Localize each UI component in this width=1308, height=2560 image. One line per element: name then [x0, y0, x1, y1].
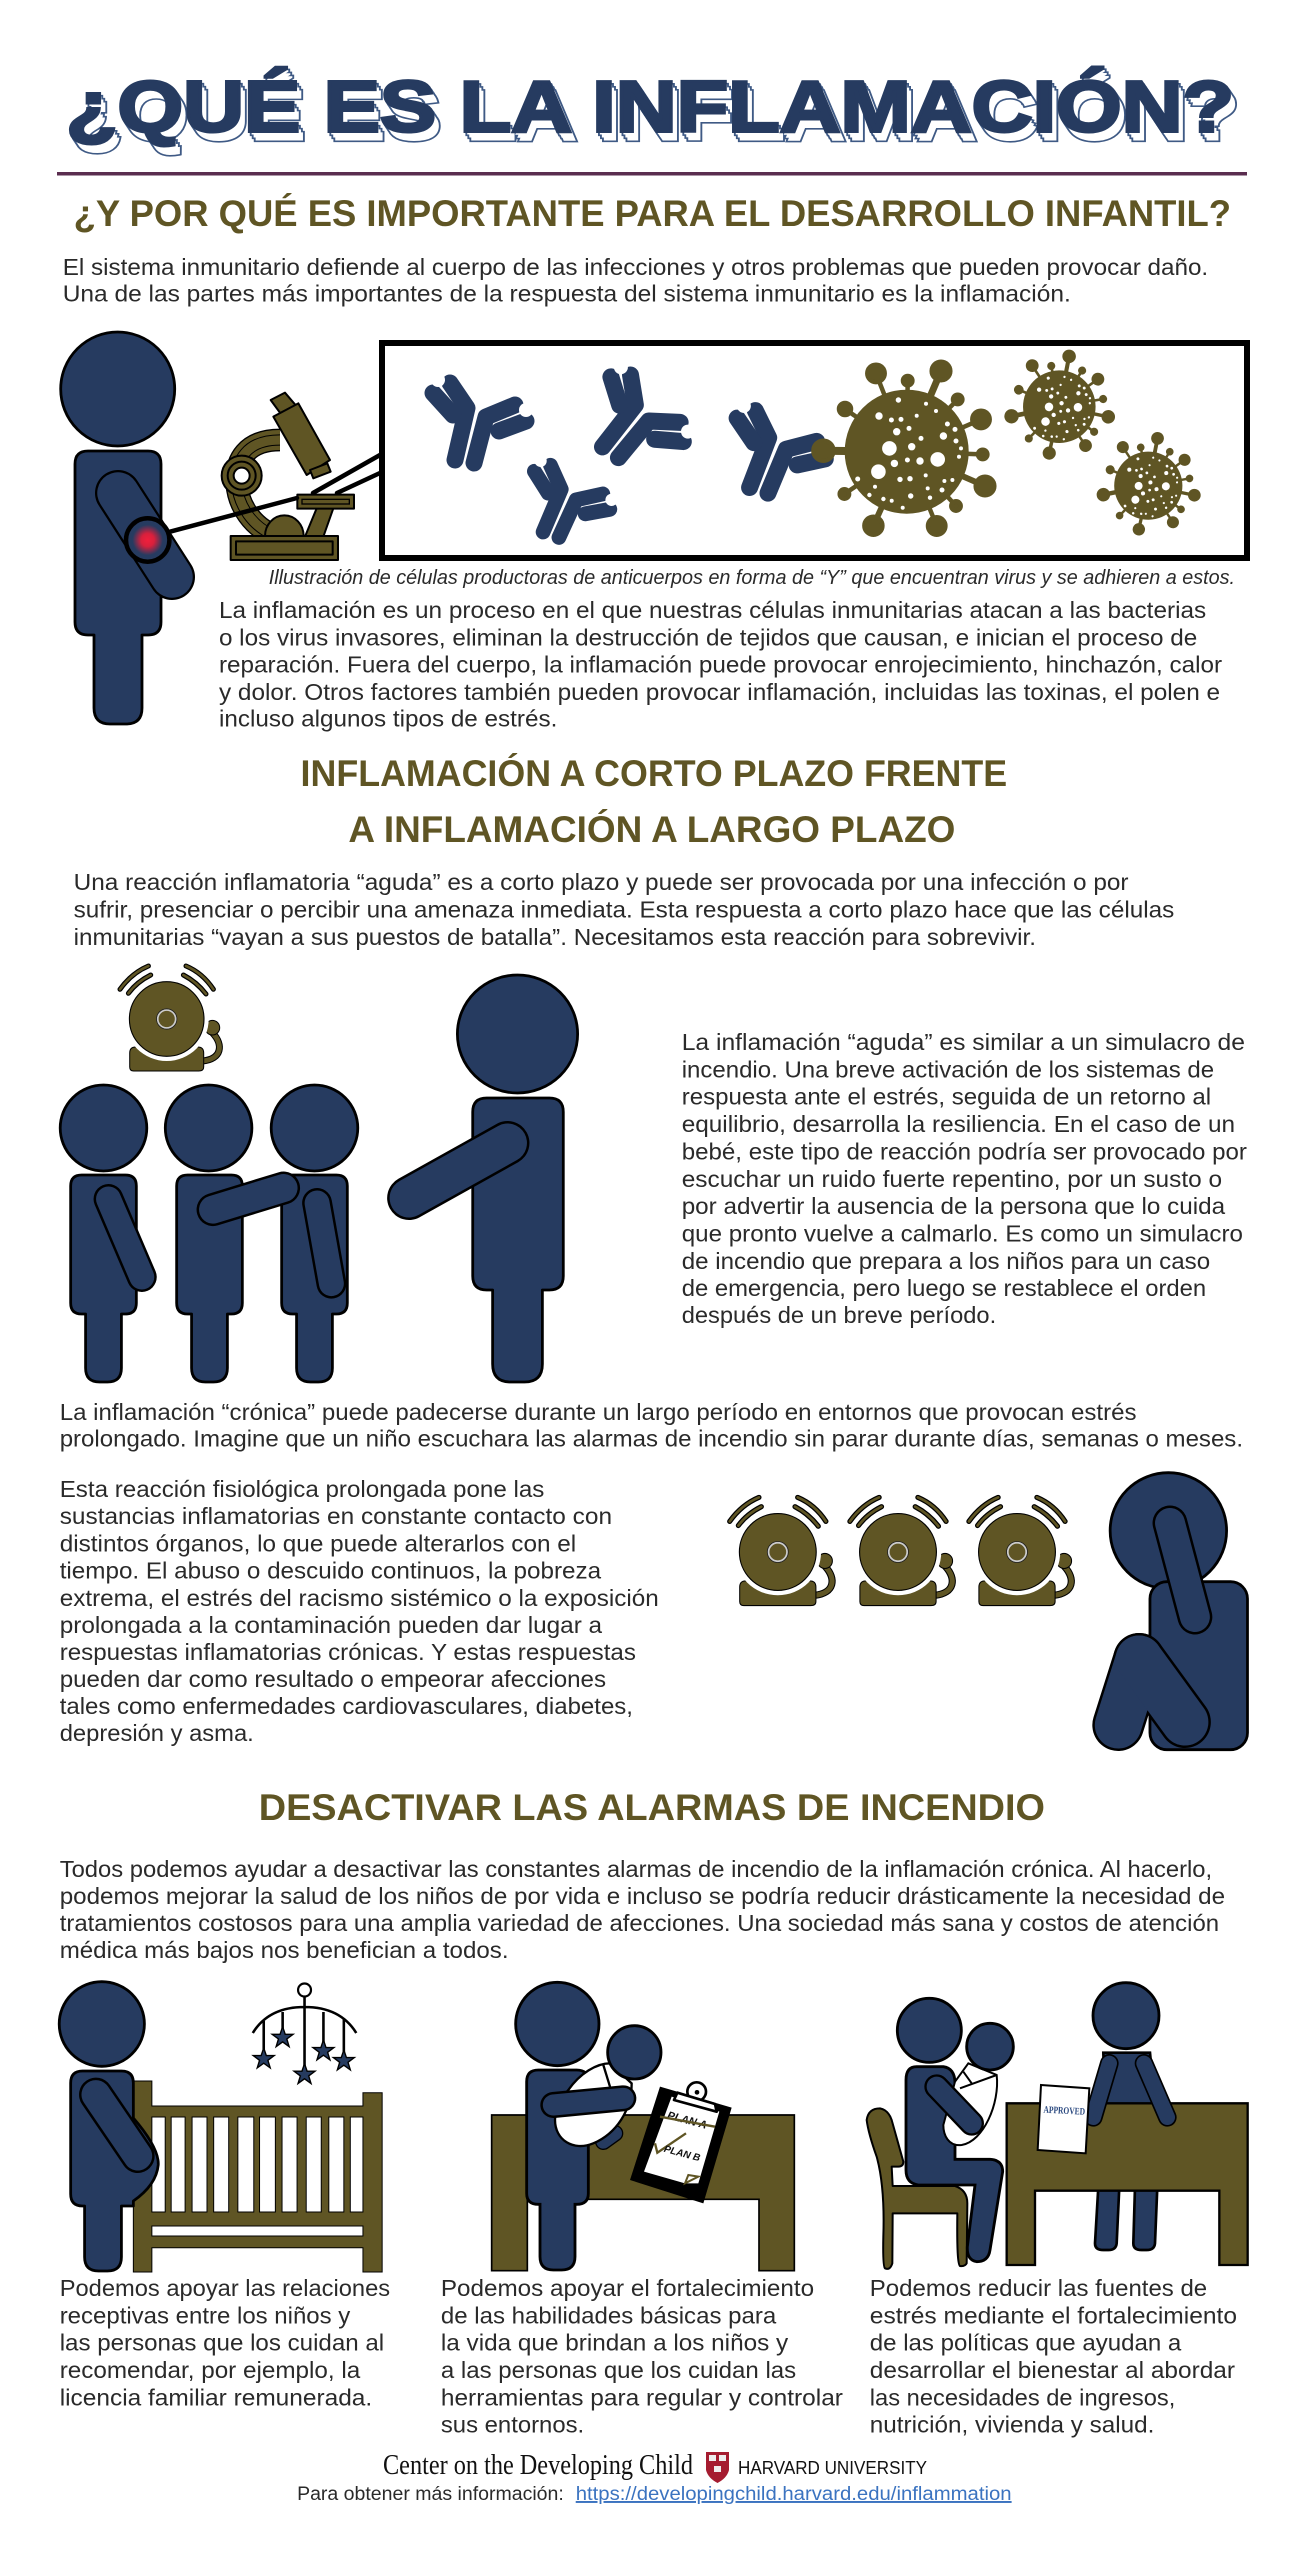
text block: policies: estrés mediante el fortalecimiento: [870, 2302, 1237, 2328]
illustration: children and adult during a fire drill: [60, 975, 578, 1382]
magnification lines: [170, 455, 380, 532]
icon: antibody: [579, 358, 710, 483]
text block: prolonged physiological reaction: respuestas inflamatorias crónicas. Y estas respuestas: [60, 1639, 636, 1665]
text block: acute inflammation as fire drill: incendio. Una breve activación de los sistemas de: [682, 1056, 1214, 1083]
text block: inflammation process: o los virus invasores, eliminan la destrucción de tejidos que causan, e inician el proceso de: [219, 624, 1197, 651]
seated official legs: [1095, 2053, 1157, 2250]
text block: inflammation process: reparación. Fuera del cuerpo, la inflamación puede provocar enrojecimiento, hinchazón, calor: [219, 652, 1222, 678]
text block: chronic inflammation: La inflamación “crónica” puede padecerse durante un largo período en entornos que provocan estrés: [60, 1399, 1137, 1425]
approved paper: [1038, 2085, 1089, 2153]
text block: life skills: la vida que brindan a los niños y: [441, 2330, 788, 2356]
text block: acute inflammation as fire drill: [682, 1029, 1247, 1328]
footer: more information link: Para obtener más información:: [297, 2483, 564, 2505]
text block: acute inflammation as fire drill: que pronto vuelve a calmarlo. Es como un simulacro: [682, 1220, 1243, 1246]
crib: [133, 2081, 382, 2272]
icon: crouching person: [1110, 1473, 1247, 1750]
text block: inflammation process: incluso algunos tipos de estrés.: [219, 706, 557, 732]
text block: prolonged physiological reaction: prolongada a la contaminación pueden dar lugar a: [60, 1612, 603, 1638]
text block: acute inflammation as fire drill: escuchar un ruido fuerte repentino, por un susto o: [682, 1166, 1222, 1192]
text block: responsive relationships: Podemos apoyar las relaciones: [60, 2275, 390, 2301]
text block: helping: Todos podemos ayudar a desactivar las constantes alarmas de incendio de la inflamación crónica. Al hacerlo,: [60, 1856, 1212, 1882]
text block: acute reaction: Una reacción inflamatoria “aguda” es a corto plazo y puede ser provocada por una infección o por: [74, 869, 1129, 895]
icon: alarm bell: [730, 1497, 832, 1606]
text block: prolonged physiological reaction: distintos órganos, lo que puede alterarlos con el: [60, 1530, 576, 1557]
text block: chronic inflammation: [60, 1399, 1243, 1452]
text block: responsive relationships: las personas que los cuidan al: [60, 2330, 384, 2356]
heading: short vs long term: [301, 752, 1007, 850]
icon: antibody: [522, 454, 623, 546]
clipboard with plans: [630, 2082, 732, 2203]
illustration: caregiver at crib: [59, 1982, 382, 2272]
text block: prolonged physiological reaction: [60, 1476, 659, 1746]
icon: antibody attached to virus: [725, 398, 839, 501]
text block: acute reaction: sufrir, presenciar o percibir una amenaza inmediata. Esta respuesta a corto plazo hace que las células: [74, 896, 1174, 923]
text block: policies: las necesidades de ingresos,: [870, 2384, 1175, 2410]
text block: helping: podemos mejorar la salud de los niños de por vida e incluso se podría reducir drásticamente la necesidad de: [60, 1883, 1225, 1909]
icon: microscope: [222, 393, 354, 560]
text block: responsive relationships: [60, 2275, 390, 2410]
text block: acute inflammation as fire drill: bebé, este tipo de reacción podría ser provocado por: [682, 1138, 1247, 1165]
text block: inflammation process: La inflamación es un proceso en el que nuestras células inmunitarias atacan a las bacterias: [219, 597, 1206, 623]
child 1: [60, 1085, 147, 1382]
text block: policies: de las políticas que ayudan a: [870, 2330, 1182, 2356]
text block: life skills: [441, 2275, 843, 2438]
icon: alarm bell: [120, 966, 220, 1071]
text block: helping: tratamientos costosos para una amplia variedad de afecciones. Una sociedad más sana y costos de atención: [60, 1910, 1219, 1936]
icon: antibody: [431, 373, 533, 463]
approved paper: APPROVED: [1043, 2105, 1085, 2118]
footer: more information link: [297, 2483, 1012, 2505]
text block: life skills: sus entornos.: [441, 2412, 584, 2438]
text block: prolonged physiological reaction: Esta reacción fisiológica prolongada pone las: [60, 1476, 544, 1502]
text block: acute inflammation as fire drill: por advertir la ausencia de la persona que lo cuida: [682, 1193, 1226, 1219]
caregiver: [59, 1982, 158, 2271]
icon: person with inflamed arm: [61, 332, 175, 724]
adult: [409, 975, 578, 1382]
footer logo: [383, 2450, 927, 2483]
text block: prolonged physiological reaction: extrema, el estrés del racismo sistémico o la exposición: [60, 1585, 659, 1611]
text block: acute reaction: [74, 869, 1174, 950]
text block: intro: Una de las partes más importantes de la respuesta del sistema inmunitario es la inflamación.: [63, 280, 1071, 307]
text block: prolonged physiological reaction: pueden dar como resultado o empeorar afecciones: [60, 1666, 606, 1692]
illustration: caregiver, baby and official at desk: [867, 1983, 1248, 2269]
footer: more information link: https://developingchild.harvard.edu/inflammation: [576, 2483, 1012, 2505]
text block: intro: [63, 254, 1208, 307]
text block: prolonged physiological reaction: sustancias inflamatorias en constante contacto con: [60, 1503, 612, 1529]
text block: life skills: Podemos apoyar el fortalecimiento: [441, 2275, 814, 2301]
text block: life skills: a las personas que los cuidan las: [441, 2357, 796, 2383]
heading: short vs long term: INFLAMACIÓN A CORTO PLAZO FRENTE: [301, 752, 1007, 794]
heading: short vs long term: A INFLAMACIÓN A LARGO PLAZO: [348, 808, 955, 850]
panel: magnified view of antibodies and viruses: [382, 343, 1247, 558]
clipboard with plans: PLAN B: [663, 2144, 701, 2164]
text block: acute inflammation as fire drill: después de un breve período.: [682, 1302, 996, 1328]
text block: acute inflammation as fire drill: respuesta ante el estrés, seguida de un retorno al: [682, 1084, 1211, 1110]
text block: intro: El sistema inmunitario defiende al cuerpo de las infecciones y otros problemas que pueden provocar daño.: [63, 254, 1208, 280]
icon: virus large: [813, 362, 994, 535]
icon: alarm bell: [969, 1497, 1072, 1606]
text block: acute inflammation as fire drill: equilibrio, desarrolla la resiliencia. En el caso de un: [682, 1111, 1235, 1137]
text block: prolonged physiological reaction: depresión y asma.: [60, 1720, 254, 1746]
text block: policies: Podemos reducir las fuentes de: [870, 2275, 1207, 2301]
icon: Harvard shield: [706, 2452, 729, 2483]
text block: helping: médica más bajos nos benefician a todos.: [60, 1937, 509, 1963]
text block: inflammation process: y dolor. Otros factores también pueden provocar inflamación, incluidas las toxinas, el polen e: [219, 679, 1220, 705]
child 2: [165, 1085, 284, 1382]
text block: prolonged physiological reaction: tales como enfermedades cardiovasculares, diabetes,: [60, 1693, 633, 1719]
footer logo: Center on the Developing Child: [383, 2450, 693, 2481]
title: [66, 66, 1240, 156]
text block: responsive relationships: recomendar, por ejemplo, la: [60, 2357, 361, 2383]
text block: helping: [60, 1856, 1225, 1963]
text block: policies: nutrición, vivienda y salud.: [870, 2412, 1154, 2438]
text block: acute inflammation as fire drill: de emergencia, pero luego se restablece el orden: [682, 1275, 1206, 1301]
text block: life skills: de las habilidades básicas para: [441, 2302, 777, 2328]
footer logo: HARVARD UNIVERSITY: [738, 2458, 927, 2478]
chair: [867, 2108, 967, 2269]
crib mobile: [253, 1984, 356, 2084]
illustration: adult with baby and clipboard: [492, 1982, 794, 2271]
clipboard with plans: PLAN A: [666, 2110, 708, 2132]
text block: chronic inflammation: prolongado. Imagine que un niño escuchara las alarmas de incendio sin parar durante días, semanas o meses.: [60, 1426, 1243, 1452]
seated caregiver: [906, 2067, 1003, 2262]
caption: Illustración de células productoras de anticuerpos en forma de “Y” que encuentran virus y se adhieren a estos.: [269, 567, 1235, 589]
text block: policies: [870, 2275, 1237, 2438]
text block: prolonged physiological reaction: tiempo. El abuso o descuido continuos, la pobreza: [60, 1558, 602, 1584]
text block: acute inflammation as fire drill: La inflamación “aguda” es similar a un simulacro de: [682, 1029, 1245, 1055]
heading: turning off the alarms: DESACTIVAR LAS ALARMAS DE INCENDIO: [259, 1787, 1045, 1828]
text block: acute reaction: inmunitarias “vayan a sus puestos de batalla”. Necesitamos esta reacción para sobrevivir.: [74, 924, 1036, 950]
child 3: [271, 1085, 358, 1382]
text block: responsive relationships: receptivas entre los niños y: [60, 2302, 351, 2328]
icon: alarm bell: [850, 1497, 953, 1606]
desk: [1007, 2103, 1248, 2265]
icon: virus small: [1088, 427, 1205, 541]
text block: responsive relationships: licencia familiar remunerada.: [60, 2384, 372, 2410]
text block: life skills: herramientas para regular y controlar: [441, 2384, 843, 2410]
heading: subtitle: ¿Y POR QUÉ ES IMPORTANTE PARA EL DESARROLLO INFANTIL?: [74, 193, 1231, 234]
text block: inflammation process: [219, 597, 1222, 732]
text block: acute inflammation as fire drill: de incendio que prepara a los niños para un caso: [682, 1248, 1210, 1274]
official arms: [1093, 2063, 1167, 2117]
icon: virus small: [995, 345, 1120, 466]
text block: policies: desarrollar el bienestar al abordar: [870, 2357, 1235, 2383]
